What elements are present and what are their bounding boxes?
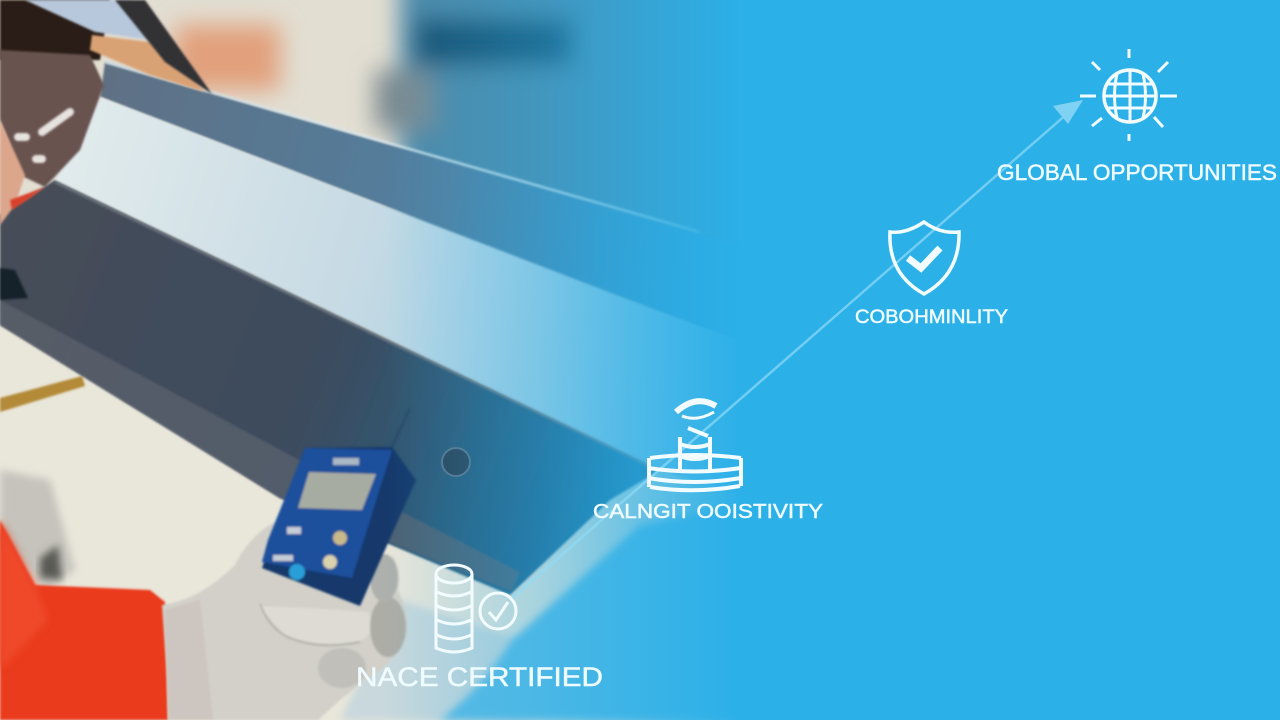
- step 2: coin stack: [593, 401, 823, 523]
- icon: shield with check: [890, 222, 959, 294]
- inspector head and goggles: [0, 0, 110, 60]
- glove: [162, 522, 407, 720]
- yellow rod: [0, 376, 85, 412]
- label: coin stack caption: CALNGIT OOISTIVITY: [593, 501, 823, 523]
- icon: coin stack with check badge: [436, 565, 516, 652]
- blurred workshop background: [175, 0, 820, 320]
- growth arrow: [510, 100, 1083, 600]
- beam upper flange: [100, 62, 760, 350]
- thickness gauge device: [262, 408, 416, 606]
- beam light face: [55, 97, 760, 500]
- label: NACE certified: NACE CERTIFIED: [356, 662, 603, 692]
- beam bolt: [442, 448, 470, 476]
- floor shading: [0, 470, 75, 590]
- beam web: [0, 180, 660, 595]
- red jacket: [0, 520, 168, 720]
- icon: globe with rays: [1080, 49, 1177, 141]
- base tones behind the photo: [0, 0, 800, 300]
- step 3: shield: [855, 222, 1008, 328]
- label: global opportunities: GLOBAL OPPORTUNITIES: [997, 160, 1277, 185]
- label: shield caption: COBOHMINLITY: [855, 307, 1008, 328]
- second blurred glove: [440, 500, 760, 720]
- icon: stacked coins: [648, 401, 741, 490]
- step 4: global opportunities: [997, 49, 1277, 185]
- step 1: NACE certified: [356, 565, 603, 692]
- beam lower lip: [0, 300, 520, 592]
- inspector helmet brim: [25, 0, 150, 40]
